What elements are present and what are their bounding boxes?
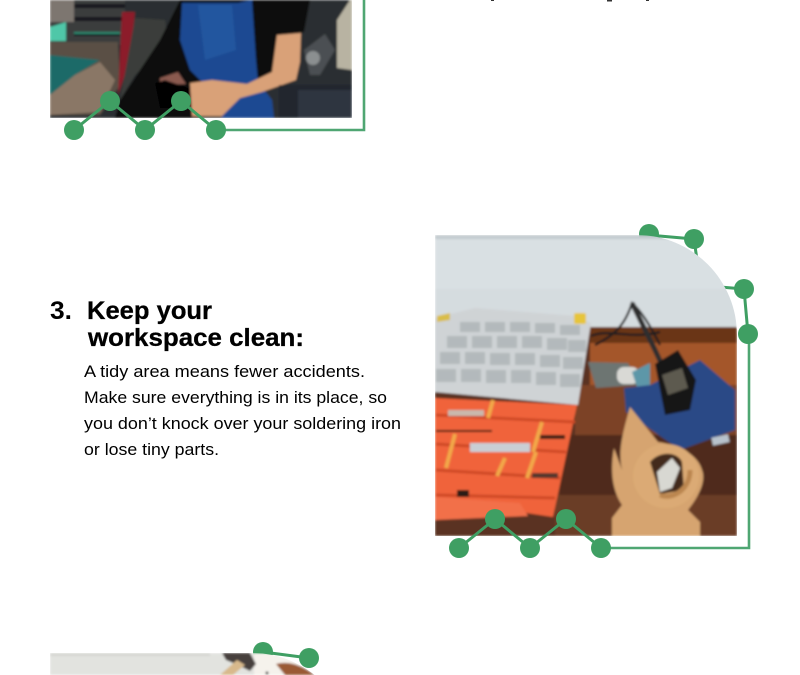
photo: step 4 hammer on light bench (50, 653, 314, 675)
frame: step 3 green connector (601, 235, 749, 548)
icons: step 2 green network nodes (64, 91, 226, 140)
text block: step 3 description: you don’t knock over your soldering iron (84, 415, 401, 433)
heading: keep your workspace clean (87, 297, 304, 352)
frame: step 2 green connector (216, 0, 364, 130)
icons: step 3 bottom network nodes (449, 509, 611, 558)
photo: technician in apron at workbench (50, 0, 352, 118)
icons: step 4 green nodes (253, 642, 319, 668)
text block: step 3 description: Make sure everything is in its place, so (84, 389, 387, 407)
heading: keep your workspace clean: Keep your (87, 297, 212, 325)
text block: step 3 description: or lose tiny parts. (84, 441, 219, 459)
text: clipped end of step 2 body copy (491, 0, 649, 2)
icons: step 3 top right nodes (639, 224, 758, 344)
text block: step 3 description (84, 363, 401, 459)
heading: keep your workspace clean: workspace clean: (87, 324, 304, 352)
heading: step 3 number: 3. (50, 297, 72, 325)
text block: step 3 description: A tidy area means fewer accidents. (84, 363, 365, 381)
photo: organizer box and soldering station (435, 235, 737, 536)
